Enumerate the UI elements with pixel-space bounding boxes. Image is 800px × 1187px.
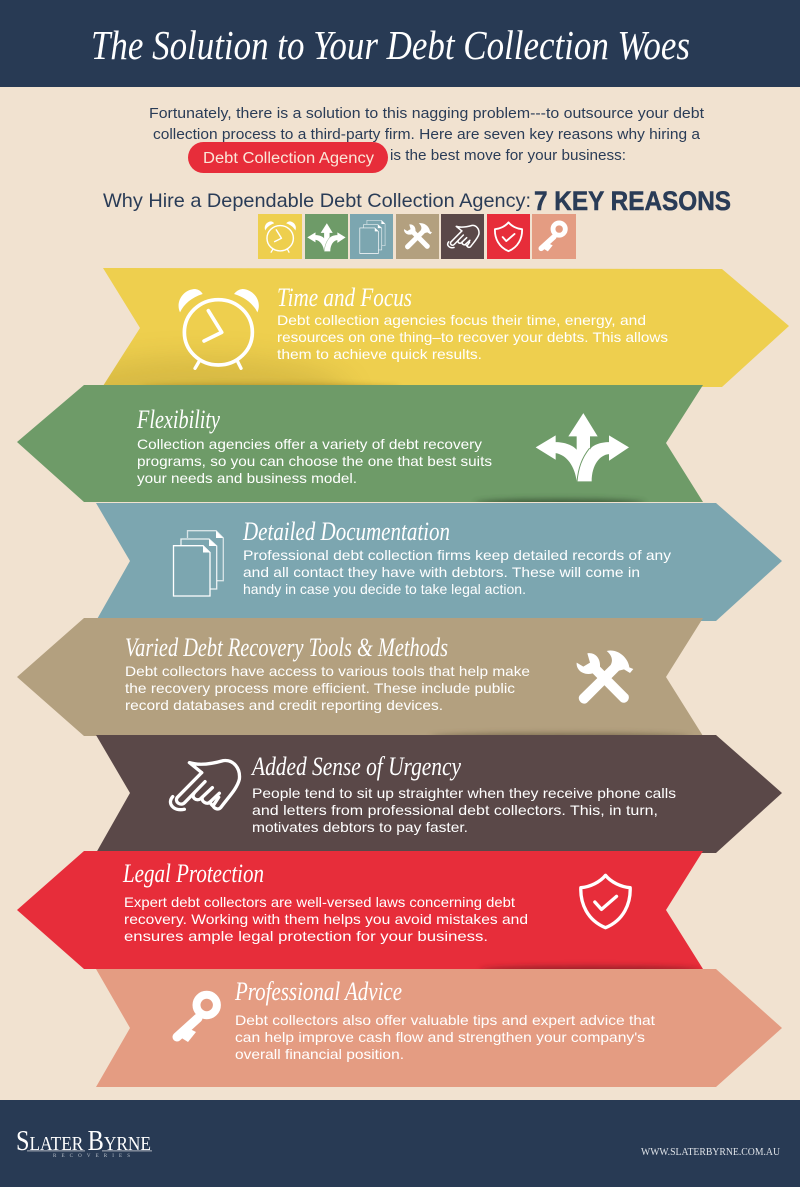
panel: legal protection — [17, 851, 703, 974]
text: flexibility: your needs and business model. — [137, 470, 357, 486]
intro text: collection process to a third-party firm. Here are seven key reasons why hiring a — [153, 126, 701, 143]
text: time and focus — [277, 312, 668, 362]
title: The Solution to Your Debt Collection Woes — [91, 22, 690, 68]
icon: wrench and hammer — [577, 651, 633, 704]
panel: varied debt recovery tools and methods — [17, 618, 703, 741]
icon: pointing hand — [170, 761, 240, 810]
heading: time and focus: Time and Focus — [277, 283, 412, 312]
subheading — [103, 186, 731, 216]
footer band — [0, 1100, 800, 1187]
text: detailed documentation: Professional debt collection firms keep detailed records of any — [243, 547, 671, 563]
heading: varied tools: Varied Debt Recovery Tools & Methods — [125, 633, 448, 662]
icon: alarm clock — [179, 289, 259, 368]
heading: flexibility: Flexibility — [136, 405, 220, 434]
text: added sense of urgency: motivates debtors to pay faster. — [252, 819, 468, 835]
text: added sense of urgency: and letters from professional debt collectors. This, in turn, — [252, 802, 658, 818]
text: detailed documentation — [243, 547, 671, 597]
intro text — [149, 105, 705, 164]
panel: added sense of urgency — [96, 735, 782, 853]
header band — [0, 0, 800, 87]
icon strip — [258, 214, 576, 259]
pill: Debt Collection Agency — [188, 142, 388, 173]
text: detailed documentation: and all contact they have with debtors. These will come in — [243, 564, 640, 580]
icon: shield — [581, 875, 630, 928]
subheading: 7 KEY REASONS — [534, 186, 731, 216]
logo: Slater Byrne Recoveries: SLATER BYRNE — [16, 1126, 151, 1157]
text: professional advice — [235, 1012, 655, 1062]
text: legal protection: ensures ample legal protection for your business. — [124, 928, 488, 944]
website url: WWW.SLATERBYRNE.COM.AU — [641, 1146, 780, 1158]
logo: Slater Byrne Recoveries: RECOVERIES — [53, 1154, 130, 1159]
text: professional advice: overall financial position. — [235, 1046, 404, 1062]
pill: Debt Collection Agency: Debt Collection Agency — [203, 150, 374, 167]
text: flexibility — [137, 436, 492, 486]
text: varied tools — [125, 663, 530, 713]
icon: three-way arrows — [536, 413, 629, 481]
text: added sense of urgency: People tend to sit up straighter when they receive phone calls — [252, 785, 676, 801]
panel: detailed documentation — [96, 503, 782, 621]
text: flexibility: Collection agencies offer a variety of debt recovery — [137, 436, 482, 452]
text: professional advice: can help improve cash flow and strengthen your company's — [235, 1029, 645, 1045]
text: varied tools: the recovery process more efficient. These include public — [125, 680, 515, 696]
icon: documents — [174, 531, 223, 596]
text: added sense of urgency — [252, 785, 676, 835]
panel: professional advice — [96, 969, 782, 1087]
text: detailed documentation: handy in case you decide to take legal action. — [243, 581, 526, 597]
icon: key — [177, 995, 217, 1042]
intro text: is the best move for your business: — [390, 147, 626, 164]
intro text: Fortunately, there is a solution to this nagging problem---to outsource your debt — [149, 105, 705, 122]
panel: time and focus — [103, 268, 789, 387]
panel: flexibility — [17, 385, 703, 507]
text: legal protection — [124, 894, 528, 944]
text: time and focus: resources on one thing–to recover your debts. This allows — [277, 329, 668, 345]
text: flexibility: programs, so you can choose the one that best suits — [137, 453, 492, 469]
text: varied tools: Debt collectors have access to various tools that help make — [125, 663, 530, 679]
text: time and focus: them to achieve quick results. — [277, 346, 482, 362]
text: professional advice: Debt collectors also offer valuable tips and expert advice that — [235, 1012, 655, 1028]
text: varied tools: record databases and credit reporting devices. — [125, 697, 443, 713]
heading: detailed documentation: Detailed Documentation — [242, 517, 450, 546]
text: time and focus: Debt collection agencies focus their time, energy, and — [277, 312, 646, 328]
subheading: Why Hire a Dependable Debt Collection Agency: — [103, 190, 531, 212]
text: legal protection: recovery. Working with them helps you avoid mistakes and — [124, 911, 528, 927]
heading: professional advice: Professional Advice — [234, 977, 402, 1006]
heading: added sense of urgency: Added Sense of Urgency — [250, 752, 461, 781]
heading: legal protection: Legal Protection — [122, 859, 264, 888]
text: legal protection: Expert debt collectors are well-versed laws concerning debt — [124, 894, 515, 910]
